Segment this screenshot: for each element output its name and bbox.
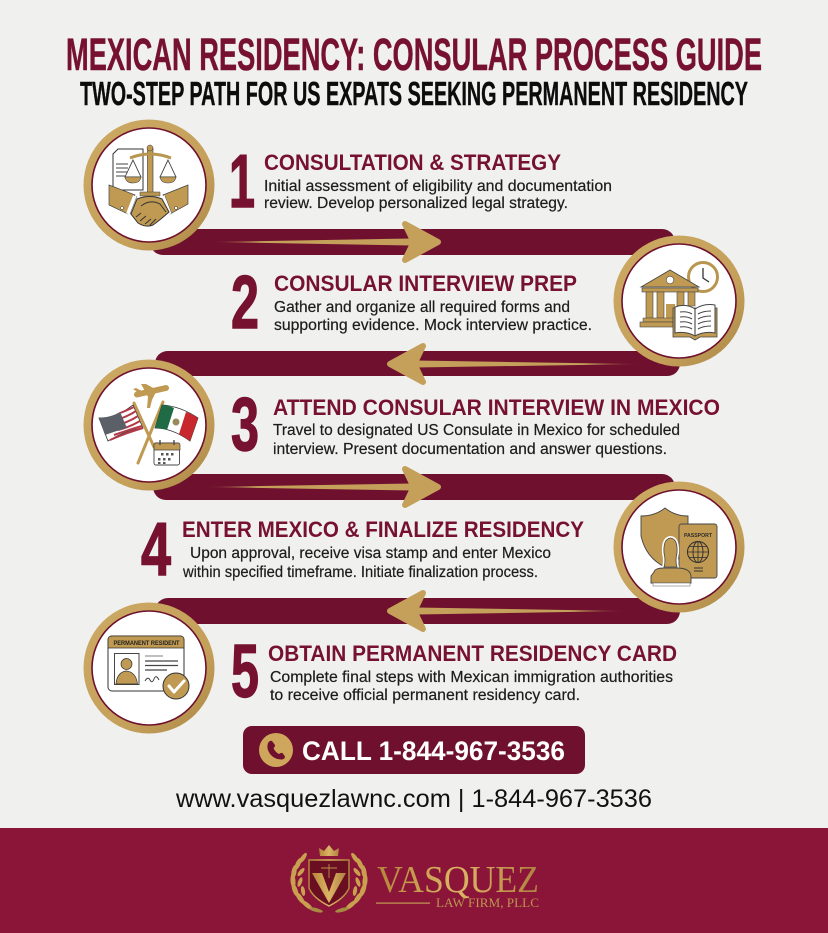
- icon: open book: [673, 304, 717, 340]
- step 2 text: CONSULAR INTERVIEW PREP: [274, 271, 577, 296]
- step 5 text: Complete final steps with Mexican immigration authorities: [270, 669, 673, 686]
- step 3 text: interview. Present documentation and answer questions.: [273, 441, 667, 458]
- footer band: [0, 828, 828, 933]
- icon: courthouse: [640, 270, 699, 327]
- step 3 badge: [84, 360, 214, 490]
- icon: residency card: PERMANENT RESIDENT: [114, 640, 180, 647]
- step 5 text: OBTAIN PERMANENT RESIDENCY CARD: [268, 641, 677, 666]
- icon: US flag: [99, 405, 143, 441]
- step 2 text: 2: [231, 260, 259, 344]
- icon: shield with V: [309, 860, 349, 906]
- logo wordmark: VASQUEZ: [377, 859, 539, 901]
- call button: [243, 726, 585, 774]
- step 5 text: 5: [231, 629, 259, 713]
- step 4 badge: [614, 482, 744, 612]
- step 1 text: [229, 139, 612, 223]
- icon: Mexican flag: [155, 405, 198, 441]
- icon: flag poles: [134, 402, 163, 463]
- website and phone line: www.vasquezlawnc.com | 1-844-967-3536: [175, 785, 652, 813]
- icon: clock: [688, 262, 718, 292]
- icon: handshake: [109, 185, 188, 226]
- step 3 text: Travel to designated US Consulate in Mexico for scheduled: [273, 422, 680, 439]
- step 1 badge: [84, 120, 214, 250]
- step 5 text: to receive official permanent residency card.: [270, 687, 580, 704]
- icon: passport: PASSPORT: [684, 533, 713, 539]
- step 4 text: ENTER MEXICO & FINALIZE RESIDENCY: [182, 517, 584, 542]
- step 1 text: Initial assessment of eligibility and documentation: [264, 178, 612, 195]
- icon: phone: [259, 733, 293, 767]
- step 4 text: within specified timeframe. Initiate finalization process.: [182, 564, 538, 581]
- connector bar 1 with right arrow: [150, 224, 675, 260]
- icon: check badge: [163, 673, 189, 699]
- logo wordmark: LAW FIRM, PLLC: [436, 896, 539, 910]
- logo emblem: [290, 845, 368, 914]
- connector bar 3 with right arrow: [153, 469, 675, 505]
- step 2 text: supporting evidence. Mock interview practice.: [274, 317, 592, 334]
- step 1 text: CONSULTATION & STRATEGY: [264, 150, 561, 175]
- step 4 text: Upon approval, receive visa stamp and enter Mexico: [190, 545, 551, 562]
- step 2 text: [231, 260, 592, 344]
- step 3 text: ATTEND CONSULAR INTERVIEW IN MEXICO: [273, 395, 720, 420]
- step 5 text: [231, 629, 677, 713]
- icon: left laurel: [290, 852, 323, 914]
- step 2 text: Gather and organize all required forms and: [274, 299, 570, 316]
- connector bar 4 with left arrow: [155, 593, 680, 629]
- icon: shield: [641, 508, 688, 567]
- icon: right laurel: [335, 852, 368, 914]
- step 2 badge: [614, 236, 744, 366]
- icon: document: [113, 149, 143, 190]
- icon: airplane: [133, 384, 166, 408]
- icon: calendar: [154, 440, 180, 465]
- call button: CALL 1-844-967-3536: [302, 736, 565, 766]
- step 3 text: [231, 382, 720, 466]
- connector bar 2 with left arrow: [155, 346, 680, 382]
- step 4 text: [141, 507, 584, 591]
- step 4 text: 4: [141, 507, 171, 591]
- step 1 text: 1: [229, 139, 255, 223]
- icon: crown: [319, 845, 339, 856]
- icon: rubber stamp: [651, 538, 691, 586]
- step 3 text: 3: [231, 382, 259, 466]
- step 1 text: review. Develop personalized legal strategy.: [264, 195, 568, 212]
- step 5 badge: [84, 602, 214, 734]
- icon: scales of justice: [116, 145, 176, 196]
